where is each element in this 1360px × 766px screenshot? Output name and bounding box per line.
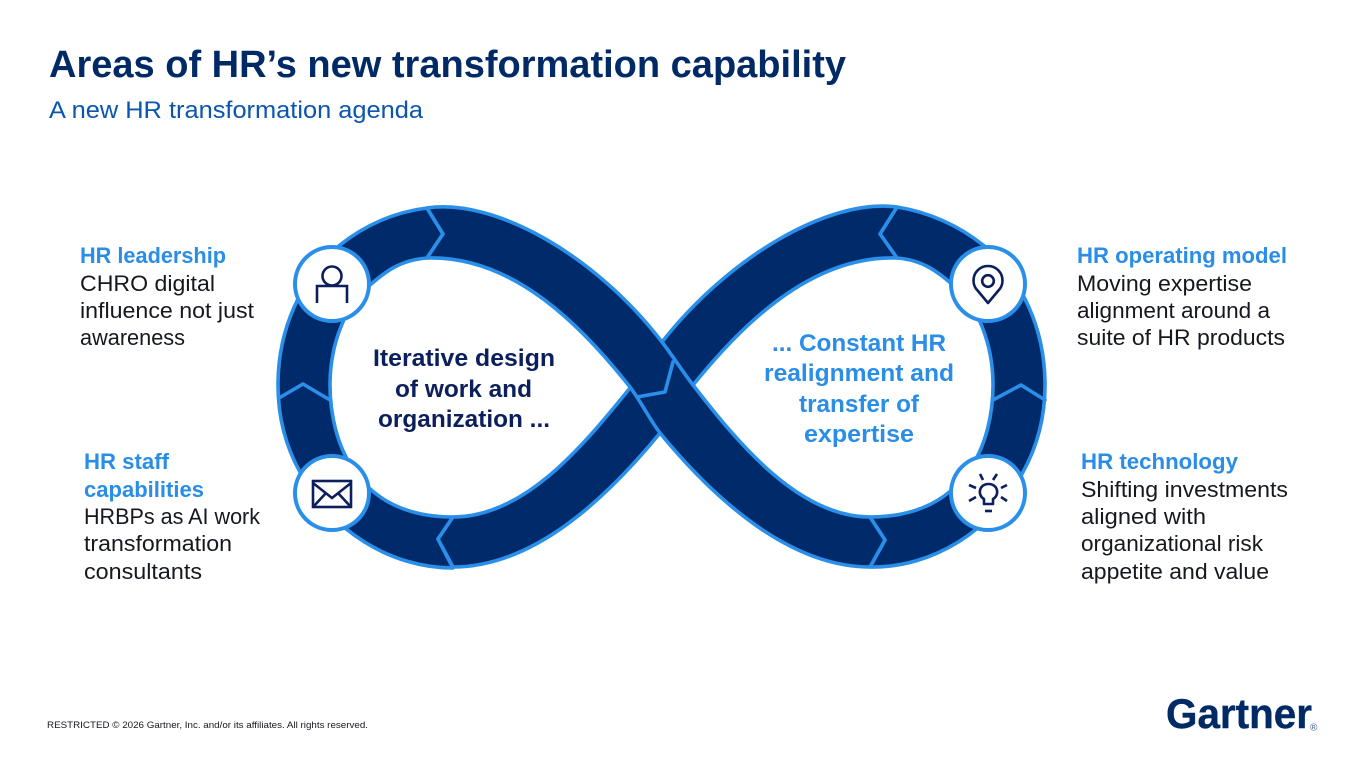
text block: HR technology: HR technology	[1081, 449, 1239, 474]
chevron at crossing	[637, 362, 673, 397]
Gartner logo: Gartner	[1166, 690, 1312, 737]
text block: HR leadership: HR leadership	[80, 243, 226, 268]
center text: left loop: Iterative design	[373, 345, 555, 372]
center text: right loop	[764, 330, 954, 448]
text block: HR staff capabilities: consultants	[84, 559, 202, 584]
footer copyright: RESTRICTED © 2026 Gartner, Inc. and/or its affiliates. All rights reserved.	[47, 720, 368, 731]
text block: HR technology	[1081, 449, 1288, 584]
center text: right loop: ... Constant HR	[772, 330, 946, 357]
text block: HR operating model: alignment around a	[1077, 298, 1271, 323]
chevron on left arc	[279, 384, 330, 400]
center text: right loop: expertise	[804, 421, 914, 448]
text block: HR technology: organizational risk	[1081, 531, 1264, 556]
icon: location pin	[951, 247, 1025, 321]
text block: HR technology: Shifting investments	[1081, 477, 1288, 502]
icon: person	[295, 247, 369, 321]
ribbon falling from upper left to lower right	[427, 207, 885, 567]
left arc segment	[278, 208, 453, 568]
text block: HR leadership: CHRO digital	[80, 271, 215, 296]
text block: HR staff capabilities: capabilities	[84, 477, 204, 502]
center text: left loop: organization ...	[378, 406, 550, 433]
text block: HR operating model	[1077, 243, 1287, 350]
right arc segment	[870, 207, 1045, 567]
center text: left loop: of work and	[395, 376, 532, 403]
Gartner logo: ®	[1310, 722, 1318, 734]
center text: left loop	[373, 345, 555, 433]
text block: HR operating model: HR operating model	[1077, 243, 1287, 268]
icon: light bulb	[951, 456, 1025, 530]
text block: HR leadership: influence not just	[80, 298, 254, 323]
text block: HR operating model: suite of HR products	[1077, 325, 1285, 350]
icon: envelope	[295, 456, 369, 530]
text block: HR technology: appetite and value	[1081, 559, 1269, 584]
text block: HR technology: aligned with	[1081, 504, 1206, 529]
center text: right loop: transfer of	[799, 391, 920, 418]
text block: HR staff capabilities: transformation	[84, 531, 232, 556]
text block: HR operating model: Moving expertise	[1077, 271, 1252, 296]
center text: right loop: realignment and	[764, 360, 954, 387]
title: Areas of HR’s new transformation capability	[49, 44, 846, 86]
text block: HR leadership: awareness	[80, 325, 185, 350]
text block: HR staff capabilities: HRBPs as AI work	[84, 504, 261, 529]
text block: HR staff capabilities: HR staff	[84, 449, 170, 474]
subtitle: A new HR transformation agenda	[49, 97, 424, 124]
infinity loop diagram	[278, 206, 1045, 568]
text block: HR staff capabilities	[84, 449, 261, 584]
text block: HR leadership	[80, 243, 254, 350]
chevron on right arc	[993, 385, 1045, 400]
ribbon rising from lower left to upper right	[438, 206, 897, 567]
